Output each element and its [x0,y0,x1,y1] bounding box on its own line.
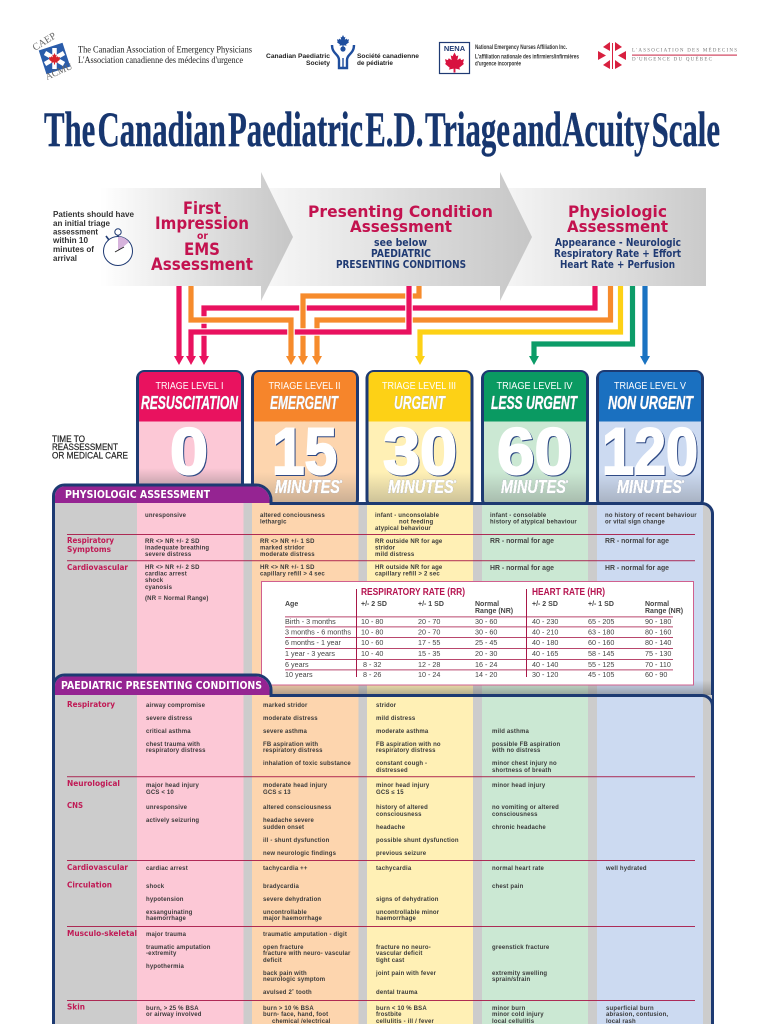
flow arrow: physiologic assessment: Heart Rate + Perfusion [560,259,675,271]
section: neurological and CNS: headache [376,825,406,831]
row: cardiovascular: (NR = Normal Range) [145,596,209,602]
table: respiratory and heart rate by age: 20 - 70 [418,617,440,626]
note: initial triage assessment: Patients should have [53,210,135,219]
table: respiratory and heart rate by age: 60 - 160 [588,638,614,647]
note: initial triage assessment: minutes of [53,245,94,254]
triage level II card: EMERGENT [270,393,339,413]
section: musculo-skeletal: back pain with [263,971,307,977]
section: respiratory: distressed [376,768,408,774]
triage level IV card: 60 [497,414,572,488]
section: musculo-skeletal: neurologic symptom [263,977,325,983]
table: respiratory and heart rate by age: +/- 1 SD [588,601,614,608]
row: cardiovascular: cardiac arrest [145,572,187,578]
table: respiratory and heart rate by age: 10 - 40 [361,649,383,658]
section: neurological and CNS: possible shunt dysfunction [376,838,459,844]
table: respiratory and heart rate by age: 3 months - 6 months [285,628,351,636]
section: neurological and CNS: altered consciousness [263,805,332,811]
table: respiratory and heart rate by age: 40 - 230 [532,617,558,626]
section: cardiovascular and circulation: bradycardia [263,884,299,890]
triage level IV card: * [566,480,568,487]
note: initial triage assessment [52,210,135,263]
triage level III card: 30 [383,414,457,488]
table: respiratory and heart rate by age: 12 - 28 [418,660,440,669]
section: respiratory: stridor [376,703,397,709]
table: respiratory and heart rate by age: 30 - 120 [532,670,558,679]
section: neurological and CNS: moderate head injury [263,783,328,789]
table: respiratory and heart rate by age: 15 - 35 [418,649,440,658]
connector arrows: assessment to triage levels [174,280,650,365]
table: respiratory and heart rate by age: 58 - 145 [588,649,614,658]
flow arrow: presenting condition assessment: Assessment [350,217,452,236]
section: musculo-skeletal: fracture no neuro- [376,945,431,951]
table: respiratory and heart rate by age: 80 - 160 [645,628,671,636]
triage level IV card: MINUTES [501,477,582,497]
table: respiratory and heart rate by age: 16 - 24 [475,660,497,669]
section: neurological and CNS: unresponsive [146,805,188,811]
tab: paediatric presenting conditions heading [55,676,270,695]
note: initial triage assessment: assessment [53,228,98,236]
section: neurological and CNS: consciousness [492,812,538,818]
section: skin: superficial burn [606,1006,654,1012]
section: respiratory: respiratory distress [263,748,323,754]
row: respiratory symptoms: Symptoms [67,545,111,554]
row: respiratory symptoms [67,536,669,558]
logo: Canadian Association of Emergency Physicians [31,30,252,83]
section: cardiovascular and circulation: haemorrhage [376,916,416,922]
logo: Canadian Association of Emergency Physicians: CAEP [31,30,59,54]
table: respiratory and heart rate by age: 8 - 32 [363,660,381,669]
row: appearance [145,513,697,532]
logo: Canadian Paediatric Society: de pédiatrie [357,61,394,67]
flow arrow: physiologic assessment: Appearance - Neurologic [555,237,681,249]
label: time to reassessment: REASSESSMENT [52,442,118,452]
table: respiratory and heart rate by age: 40 - 210 [532,628,558,636]
section: neurological and CNS: new neurologic findings [263,851,337,857]
section: cardiovascular and circulation: uncontrollable minor [376,910,440,916]
logo: National Emergency Nurses Affiliation: d'urgence incorporée [475,62,521,68]
row: cardiovascular: HR - normal for age [490,565,554,572]
triage level III card: * [454,480,456,487]
table: respiratory and heart rate by age: 20 - 70 [418,628,440,636]
flow arrow: first impression or EMS assessment [100,172,293,301]
section: skin: frostbite [376,1012,402,1018]
section: cardiovascular and circulation: haemorrhage [146,916,186,922]
section: musculo-skeletal: joint pain with fever [375,971,437,977]
triage level IV card: LESS URGENT [491,393,578,413]
row: appearance: altered conciousness [260,513,325,519]
section: neurological and CNS: GCS ≤ 13 [263,790,291,796]
table: respiratory and heart rate by age: 70 - 110 [645,660,671,669]
table: respiratory and heart rate by age: 45 - 105 [588,670,614,679]
section: respiratory: inhalation of toxic substance [263,761,351,767]
section: neurological and CNS: minor head injury [492,783,546,789]
note: initial triage assessment: within 10 [52,236,89,245]
row: respiratory symptoms: stridor [375,546,396,552]
section: respiratory: constant cough - [376,761,427,767]
section: musculo-skeletal: greenstick fracture [492,945,550,951]
logo: Association des médecins d'urgence du Québec: L'ASSOCIATION DES MÉDECINS [632,48,737,54]
logo: Canadian Association of Emergency Physicians: ACMU [44,62,74,83]
section: musculo-skeletal: extremity swelling [492,971,547,977]
table: respiratory and heart rate by age: 80 - 140 [645,638,671,647]
table: respiratory and heart rate by age: 60 - 90 [645,670,667,679]
table: respiratory and heart rate by age: 65 - 205 [588,617,614,626]
row: appearance: lethargic [260,520,287,526]
tab: physiologic assessment heading [55,486,270,503]
table: respiratory and heart rate by age: 10 - 60 [361,638,383,647]
table: respiratory and heart rate by age: 10 - 80 [361,628,383,636]
section: cardiovascular and circulation: cardiac arrest [146,866,188,872]
section: neurological and CNS: no vomiting or altered [492,805,559,811]
icon: stopwatch [104,229,132,266]
row: appearance: unresponsive [145,513,187,519]
flow arrow: first impression or EMS assessment: Assessment [151,255,253,275]
flow arrow: first impression or EMS assessment: First [183,199,221,219]
table: respiratory and heart rate by age: 40 - 165 [532,649,558,658]
row: appearance: no history of recent behaviour [605,513,697,519]
section: musculo-skeletal: sprain/strain [492,977,531,983]
row: respiratory symptoms: RR - normal for age [490,538,554,545]
triage level I card: TRIAGE LEVEL I [156,381,224,392]
triage level I card: 0 [170,414,208,488]
row: cardiovascular: capillary refill > 2 sec [375,572,440,578]
section: respiratory: mild distress [376,716,416,722]
section: skin: minor cold injury [492,1012,544,1018]
section: respiratory: respiratory distress [146,748,206,754]
table: respiratory and heart rate by age: 55 - 125 [588,660,614,669]
row: cardiovascular: shock [145,578,164,584]
section: cardiovascular and circulation: shock [146,884,165,890]
triage level I card: RESUSCITATION [141,393,239,413]
table: respiratory and heart rate by age: 14 - 20 [475,670,497,679]
section: cardiovascular and circulation: signs of dehydration [376,897,439,903]
section: musculo-skeletal [67,929,550,996]
logo: Canadian Paediatric Society: Society [306,61,331,67]
triage level III card: URGENT [394,393,446,413]
section: cardiovascular and circulation: Cardiovascular [67,863,128,872]
section: respiratory: FB aspiration with [263,742,318,748]
table: respiratory and heart rate by age: 30 - 60 [475,617,497,626]
row: cardiovascular [67,563,669,602]
section: musculo-skeletal: traumatic amputation - digit [263,932,347,938]
table: respiratory and heart rate by age: +/- 1 SD [418,601,444,608]
section: cardiovascular and circulation: tachycardia ++ [263,866,308,872]
table: respiratory and heart rate by age: +/- 2 SD [361,601,387,608]
section: cardiovascular and circulation: Circulation [67,880,112,890]
flow arrow: physiologic assessment: Physiologic [568,202,667,221]
section: cardiovascular and circulation: severe dehydration [263,897,321,903]
row: cardiovascular: Cardiovascular [67,563,128,572]
section: neurological and CNS [67,779,559,857]
triage level II card: * [340,480,342,487]
section: skin: burn > 10 % BSA [263,1006,314,1012]
flow arrow: physiologic assessment: Assessment [567,217,668,236]
triage level II card [252,372,358,506]
row: appearance: atypical behaviour [375,526,431,532]
table: respiratory and heart rate by age [262,582,694,685]
logo: Association des médecins d'urgence du Québec: D'URGENCE DU QUÉBEC [632,56,713,62]
section: neurological and CNS: headache severe [263,818,315,824]
section: musculo-skeletal: tight cast [376,958,404,964]
table: respiratory and heart rate by age: HEART RATE (HR) [532,586,605,598]
row: cardiovascular: capillary refill > 4 sec [260,572,325,578]
logo: Association des médecins d'urgence du Québec [598,42,737,69]
row: cardiovascular: HR <> NR +/- 2 SD [145,565,200,571]
table: respiratory and heart rate by age: Normal [475,601,499,608]
flow arrow: presenting condition assessment [261,172,532,301]
section: respiratory: severe asthma [263,729,308,735]
row: respiratory symptoms: RR - normal for age [605,538,669,545]
section: cardiovascular and circulation [67,863,647,922]
triage level V card: MINUTES [617,477,698,497]
section: skin: minor burn [492,1006,526,1012]
row: respiratory symptoms: inadequate breathing [145,546,209,552]
table: respiratory and heart rate by age: Age [285,601,298,608]
table: respiratory and heart rate by age: 20 - 30 [475,649,497,658]
flow arrow: physiologic assessment [500,188,706,286]
table: respiratory and heart rate by age: 30 - 60 [475,628,497,636]
row: cardiovascular: HR - normal for age [605,565,669,572]
table: respiratory and heart rate by age: 10 - 24 [418,670,440,679]
table: respiratory and heart rate by age: Normal [645,601,669,608]
table: respiratory and heart rate by age: 10 - 80 [361,617,383,626]
section: musculo-skeletal: dental trauma [376,990,418,996]
section: respiratory: airway compromise [146,703,206,709]
logo: Canadian Paediatric Society: Société canadienne [357,54,420,60]
table: respiratory and heart rate by age: 8 - 26 [363,670,381,679]
table: respiratory and heart rate by age: RESPIRATORY RATE (RR) [361,586,465,598]
triage level III card: TRIAGE LEVEL III [382,381,456,392]
section: skin [67,1002,668,1024]
section: respiratory: with no distress [491,748,541,754]
table: respiratory and heart rate by age: 17 - 55 [418,638,440,647]
row: respiratory symptoms: severe distress [145,552,192,558]
triage level V card: * [682,480,684,487]
table: respiratory and heart rate by age: 6 months - 1 year [285,638,342,647]
table: respiratory and heart rate by age: 25 - 45 [475,638,497,647]
section: respiratory: marked stridor [263,703,308,709]
section: musculo-skeletal: hypothermia [146,964,184,970]
section: skin: abrasion, contusion, [606,1012,668,1018]
section: cardiovascular and circulation: tachycardia [376,866,412,872]
triage level III card: MINUTES [388,477,469,497]
flow arrow: first impression or EMS assessment: EMS [184,240,220,260]
triage level V card: 120 [602,414,698,488]
logo: National Emergency Nurses Affiliation: NENA [444,44,466,53]
table: respiratory and heart rate by age: 40 - 140 [532,660,558,669]
table: respiratory and heart rate by age: 90 - 180 [645,617,671,626]
section: respiratory: possible FB aspiration [492,742,560,748]
logo: National Emergency Nurses Affiliation: L'affiliation nationale des infirmiers/infirmières [475,54,580,60]
section: musculo-skeletal: deficit [263,958,282,964]
triage level II card: TRIAGE LEVEL II [268,381,340,392]
row: respiratory symptoms: Respiratory [67,536,115,545]
section: neurological and CNS: GCS < 10 [146,790,174,796]
logo: National Emergency Nurses Affiliation: National Emergency Nurses Affiliation Inc. [475,45,567,51]
triage level V card: TRIAGE LEVEL V [614,381,686,392]
section: respiratory: moderate distress [263,716,318,722]
triage level II card: 15 [272,414,337,488]
section: musculo-skeletal: major trauma [146,932,187,938]
logo: National Emergency Nurses Affiliation [440,42,580,74]
section: neurological and CNS: actively seizuring [146,818,199,824]
triage level V card [598,372,702,506]
section: cardiovascular and circulation: chest pain [492,884,524,890]
section: neurological and CNS: major head injury [146,783,200,789]
table: respiratory and heart rate by age: Birth - 3 months [285,617,336,626]
row: cardiovascular: HR outside NR for age [375,565,443,571]
section: neurological and CNS: CNS [67,801,83,810]
panel: physiologic assessment [54,485,712,1024]
row: respiratory symptoms: mild distress [375,552,415,558]
flow arrow: presenting condition assessment: PRESENTING CONDITIONS [336,259,466,271]
flow arrow: presenting condition assessment: see below [374,237,427,249]
section: respiratory: critical asthma [146,729,191,735]
section: neurological and CNS: chronic headache [492,825,546,831]
row: appearance: infant - consolable [490,513,547,519]
row: respiratory symptoms: RR outside NR for age [375,539,443,545]
note: initial triage assessment: an initial triage [53,219,111,228]
section: respiratory: respiratory distress [376,748,436,754]
table: respiratory and heart rate by age: +/- 2 SD [532,601,558,608]
section: cardiovascular and circulation: uncontrollable [263,910,307,916]
section: neurological and CNS: consciousness [376,812,422,818]
section: respiratory: shortness of breath [492,768,552,774]
flow arrow: first impression or EMS assessment: Impression [155,214,249,234]
table: respiratory and heart rate by age: 10 years [285,670,313,679]
row: appearance: infant - unconsolable [375,513,440,519]
section: respiratory: mild asthma [492,729,529,735]
section: neurological and CNS: ill - shunt dysfunction [263,838,330,844]
row: appearance: history of atypical behaviour [490,520,577,526]
section: respiratory: chest trauma with [146,742,200,748]
triage level I card [138,372,242,506]
label: time to reassessment: TIME TO [52,434,85,444]
row: respiratory symptoms: RR <> NR +/- 2 SD [145,539,200,545]
table: respiratory and heart rate by age: Range (NR) [645,608,683,615]
section: musculo-skeletal: fracture with neuro- vascular [263,951,351,957]
label: time to reassessment: OR MEDICAL CARE [52,450,128,460]
section: respiratory: Respiratory [67,700,116,709]
tab: physiologic assessment heading: PHYSIOLOGIC ASSESSMENT [65,489,211,501]
panel: paediatric presenting conditions [54,675,712,1024]
section: respiratory: moderate asthma [376,729,429,735]
flow arrow: presenting condition assessment: Presenting Condition [308,202,493,221]
table: respiratory and heart rate by age: 75 - 130 [645,649,671,658]
section: musculo-skeletal: open fracture [263,945,304,951]
row: cardiovascular: HR <> NR +/- 1 SD [260,565,315,571]
logo: Canadian Association of Emergency Physicians: The Canadian Association of Emergency Physicians [78,44,252,54]
section: neurological and CNS: previous seizure [376,851,427,857]
tab: paediatric presenting conditions heading: PAEDIATRIC PRESENTING CONDITIONS [61,680,262,692]
table: respiratory and heart rate by age: 40 - 180 [532,638,558,647]
logo: Canadian Paediatric Society [266,35,420,68]
note: initial triage assessment: arrival [53,254,77,263]
section: musculo-skeletal: -extremity [146,951,177,957]
triage level IV card [482,372,588,506]
triage level III card [367,372,472,506]
triage level V card: NON URGENT [608,393,694,413]
section: skin: or airway involved [146,1012,202,1018]
row: cardiovascular: cyanosis [145,585,173,591]
row: respiratory symptoms: moderate distress [260,552,315,558]
section: cardiovascular and circulation: exsanguinating [146,910,193,916]
section: respiratory [67,700,560,774]
section: neurological and CNS: Neurological [67,779,120,788]
table: respiratory and heart rate by age: 1 year - 3 years [285,649,335,658]
section: skin: burn, > 25 % BSA [146,1006,199,1012]
flow arrow: physiologic assessment: Respiratory Rate + Effort [554,248,681,260]
flow arrow: presenting condition assessment: PAEDIATRIC [371,248,431,260]
section: neurological and CNS: minor head injury [376,783,430,789]
section: neurological and CNS: sudden onset [263,825,304,831]
row: appearance: not feeding [399,520,433,526]
section: musculo-skeletal: avulsed 2˚ tooth [263,989,312,996]
row: respiratory symptoms: RR <> NR +/- 1 SD [260,539,315,545]
section: musculo-skeletal: traumatic amputation [146,945,211,951]
section: respiratory: minor chest injury no [492,761,557,767]
section: skin: Skin [67,1002,85,1012]
row: respiratory symptoms: marked stridor [260,546,305,552]
section: cardiovascular and circulation: well hydrated [605,866,647,872]
section: neurological and CNS: GCS ≤ 15 [376,790,404,796]
section: skin: burn < 10 % BSA [376,1006,427,1012]
section: cardiovascular and circulation: normal heart rate [492,866,545,872]
section: neurological and CNS: history of altered [376,805,428,811]
flow arrow: first impression or EMS assessment: or [197,231,208,242]
logo: Canadian Association of Emergency Physicians: L'Association canadienne des médecins d'urgence [78,55,243,65]
label: time to reassessment [52,434,128,460]
section: skin: burn- face, hand, foot [263,1012,328,1018]
triage level IV card: TRIAGE LEVEL IV [496,381,573,392]
section: musculo-skeletal: vascular deficit [376,951,423,957]
table: respiratory and heart rate by age: 6 years [285,660,309,669]
row: appearance: or vital sign change [605,520,665,526]
triage level II card: MINUTES [275,477,356,497]
table: respiratory and heart rate by age: Range (NR) [475,608,513,615]
table: respiratory and heart rate by age: 63 - 180 [588,628,614,636]
section: respiratory: severe distress [146,716,193,722]
section: cardiovascular and circulation: hypotension [146,897,184,903]
section: respiratory: FB aspiration with no [376,742,441,748]
logo: Canadian Paediatric Society: Canadian Paediatric [266,54,331,60]
section: musculo-skeletal: Musculo-skeletal [67,929,137,938]
section: cardiovascular and circulation: major haemorrhage [263,916,323,922]
